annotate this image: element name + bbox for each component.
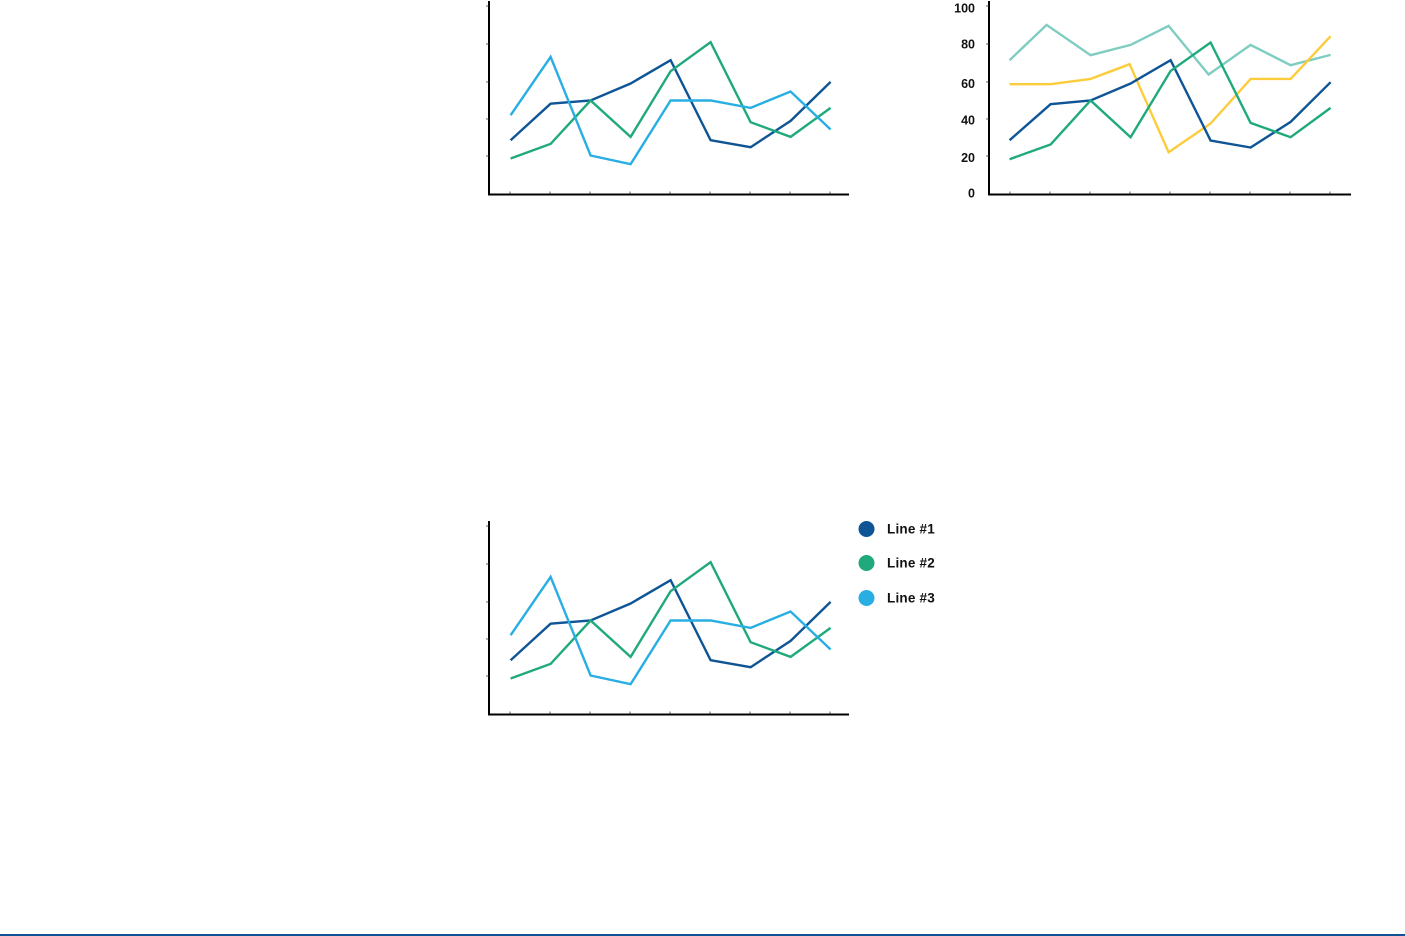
y axis labels: 80	[961, 38, 975, 52]
legend	[858, 521, 935, 606]
legend item: Line #2: Line #2	[887, 556, 935, 570]
y axis labels: 40	[961, 114, 975, 128]
y axis labels: 0	[968, 186, 975, 200]
legend item: Line #1: Line #1	[887, 522, 935, 536]
line chart: bottom, three lines	[486, 521, 849, 714]
legend item: Line #3: Line #3	[887, 590, 935, 606]
line chart: top right, four lines with y axis labels	[954, 1, 1351, 200]
y axis labels: 60	[961, 77, 975, 91]
bottom rule	[0, 934, 1405, 936]
y axis labels	[954, 2, 975, 200]
line chart: top left, three lines	[486, 1, 849, 194]
y axis labels: 100	[954, 2, 975, 16]
y axis labels: 20	[961, 151, 975, 165]
